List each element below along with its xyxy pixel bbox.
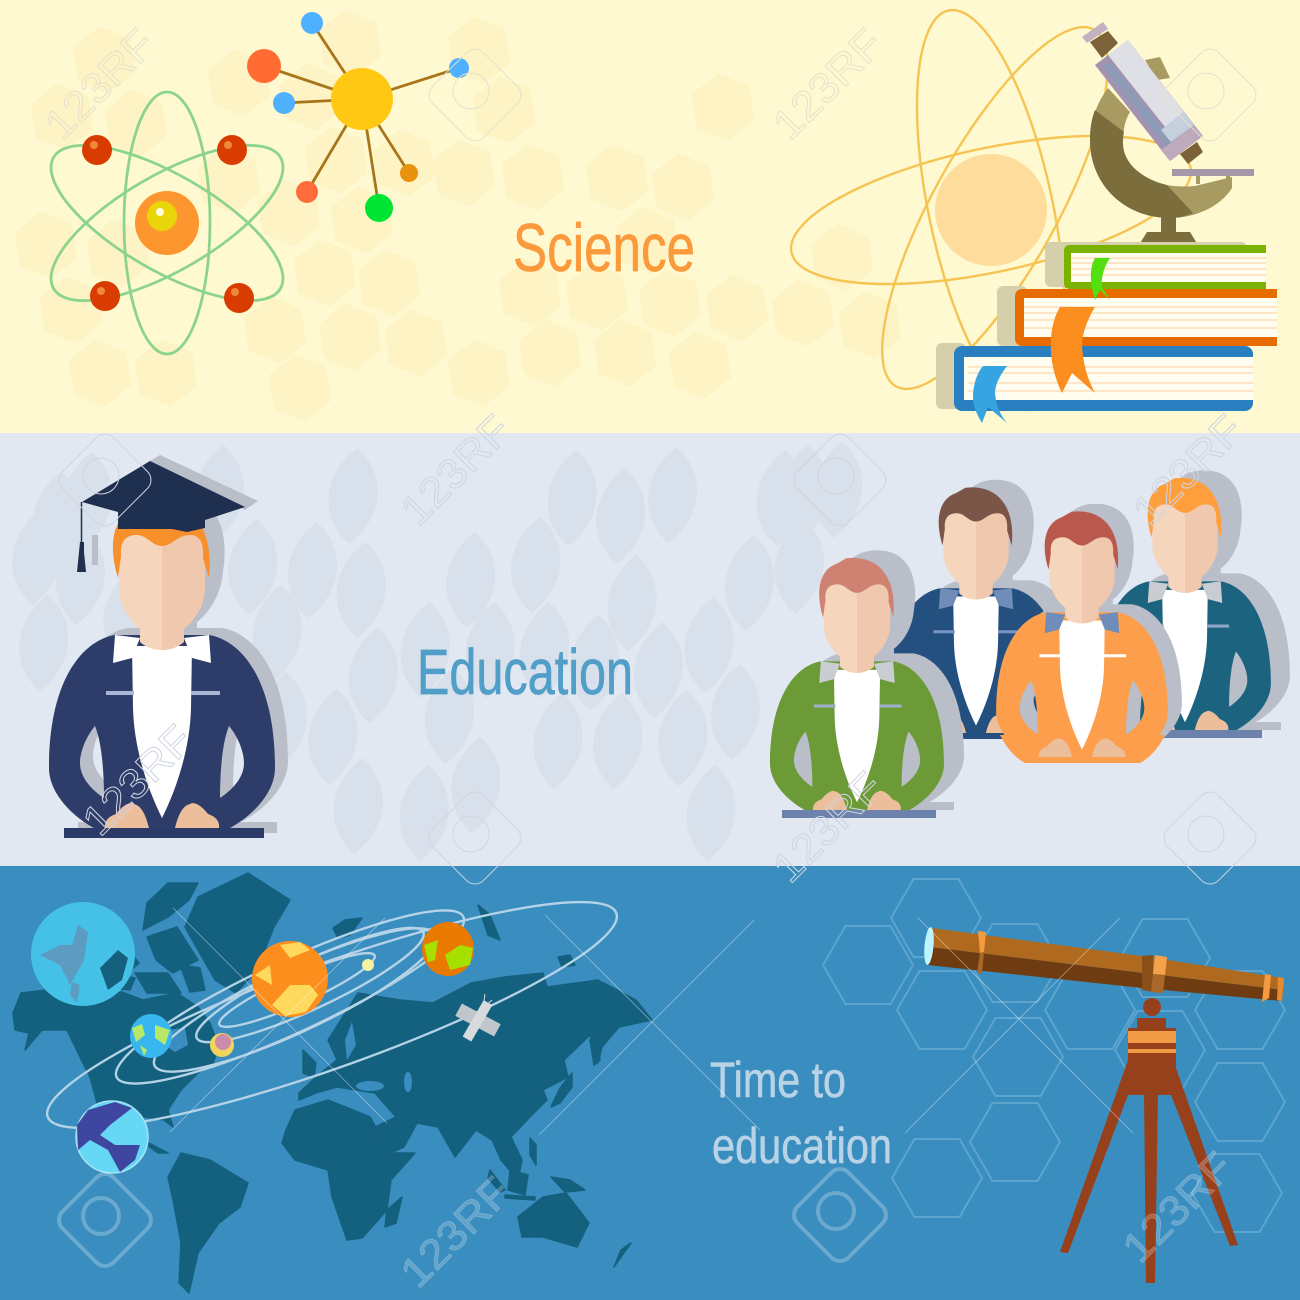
panel: time to education (0, 864, 1300, 1300)
planet: small earth (130, 1014, 172, 1058)
planet: small purple (210, 1033, 234, 1057)
bookmark: blue (973, 366, 1007, 423)
icon: graduation cap (77, 455, 258, 572)
uk (303, 1050, 316, 1077)
bookmark: orange (1051, 307, 1095, 393)
bookmark: green (1091, 258, 1110, 300)
panel: science (0, 0, 1300, 433)
icon: telescope (923, 927, 1284, 1283)
east asian islands (488, 1035, 600, 1200)
inland seas (165, 1022, 412, 1092)
background leaves (12, 442, 862, 861)
planet: orange and green (422, 922, 474, 976)
new zealand (614, 1243, 631, 1267)
icon: molecule (247, 12, 469, 222)
svalbard and arctic islands (333, 905, 575, 967)
madagascar (385, 1197, 402, 1227)
icon: stack of books (936, 242, 1277, 423)
planet: large light blue (31, 902, 135, 1006)
icon: large pale atom (779, 0, 1203, 422)
text: Time to education: education (712, 1118, 892, 1174)
watermark stamps: 123RF (35, 20, 164, 148)
text: Time to education (710, 1052, 892, 1174)
icon: atom (30, 92, 304, 354)
orange book (1015, 289, 1277, 346)
figure: orange student (996, 504, 1182, 763)
background hexagon outlines (823, 879, 1285, 1232)
watermark stamps: 123RF (1123, 406, 1252, 534)
text: Time to education: Time to (710, 1052, 846, 1108)
south america (168, 1153, 248, 1293)
heading: Education: Education (417, 636, 633, 708)
icon: satellite (455, 994, 501, 1042)
green book (1064, 245, 1266, 289)
heading: Science: Science (513, 210, 695, 286)
watermark stamps: 123RF (73, 716, 202, 844)
watermark stamps: 123RF (763, 20, 892, 148)
blue book (954, 346, 1253, 411)
icon: microscope (1082, 22, 1254, 245)
planet: orange sun (252, 941, 328, 1017)
world map (13, 873, 652, 1293)
watermark stamps: 123RF (1113, 1143, 1242, 1271)
figure: green student (770, 550, 964, 818)
greenland (185, 873, 290, 993)
africa (282, 1100, 415, 1240)
moon: small yellow (362, 959, 374, 971)
eurasia (299, 973, 652, 1180)
watermark stamps: 123RF (763, 763, 892, 891)
australia (518, 1193, 589, 1247)
arctic islands (97, 883, 205, 993)
watermark stamps: 123RF (391, 406, 520, 534)
background hexagons (13, 5, 903, 426)
figure: teal student (1099, 470, 1290, 738)
watermark stamps: 123RF (391, 1168, 520, 1296)
figure: teacher in graduation cap (49, 455, 288, 838)
north america (13, 990, 219, 1153)
panel: education (0, 433, 1300, 866)
planet: large earth (76, 1101, 148, 1173)
planetary orbits (30, 864, 634, 1166)
figure: blue student (890, 480, 1082, 739)
